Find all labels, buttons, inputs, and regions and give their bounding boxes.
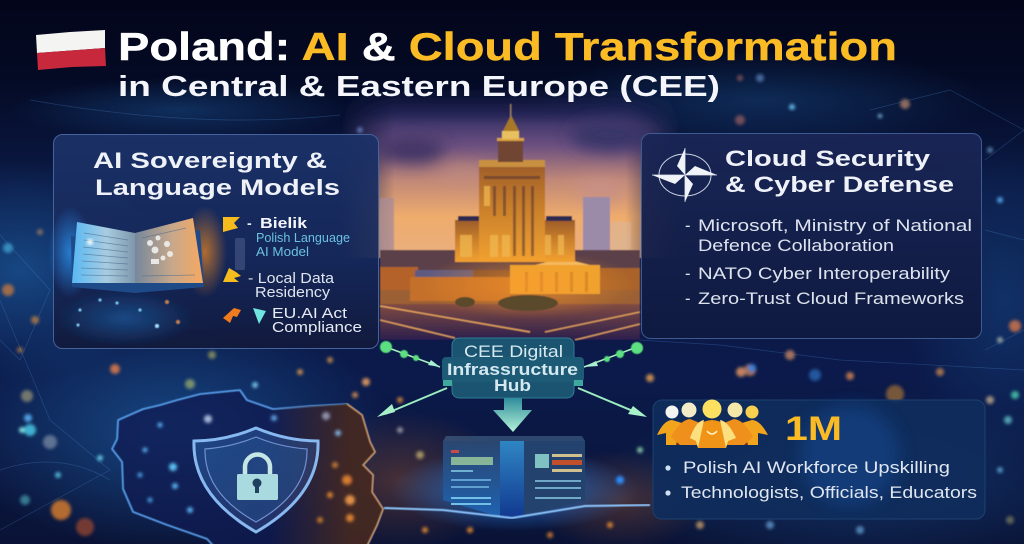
icon: glowing open book	[48, 206, 227, 298]
faded connector	[235, 238, 245, 270]
arrow: hub down to server	[493, 398, 532, 432]
title line one: Poland: AI & Cloud Transformation	[118, 26, 897, 69]
item: Bielik	[247, 215, 350, 259]
map outline	[112, 390, 383, 544]
arrow: hub to workforce panel	[578, 388, 647, 417]
title line two: in Central & Eastern Europe (CEE)	[118, 71, 720, 103]
side towers	[380, 198, 394, 250]
main tower	[479, 162, 545, 260]
bullet list: Technologists, Officials, Educators	[681, 484, 977, 502]
item: Bielik: Polish Language	[256, 230, 350, 245]
item: Bielik: -	[247, 215, 252, 231]
bullet list	[685, 217, 972, 308]
item: local data residency: - Local Data	[248, 270, 335, 287]
horizon city	[380, 250, 640, 270]
arrow: top right data chain to hub	[584, 342, 643, 367]
network dots in panel	[55, 290, 195, 346]
panel: workforce upskilling	[653, 400, 985, 519]
clouds	[378, 119, 650, 200]
bullet list: -	[685, 265, 690, 283]
arrow: hub to Poland map	[377, 388, 447, 417]
bullet list: Defence Collaboration	[698, 237, 894, 255]
callout: CEE Digital Infrastructure Hub: CEE Digital	[464, 342, 563, 361]
callout: CEE Digital Infrastructure Hub: Infrassructure	[447, 360, 578, 379]
bullet list: Polish AI Workforce Upskilling	[683, 459, 950, 477]
icon: yellow marker two	[223, 268, 241, 282]
panel: AI sovereignty and language models: Language Models	[95, 175, 340, 200]
panel: cloud security and cyber defense	[642, 134, 982, 338]
icon: NATO compass star	[652, 148, 717, 202]
server screens	[451, 450, 582, 505]
item: Bielik: Bielik	[260, 215, 308, 232]
photo: Palace of Culture and Science at sunset	[340, 88, 680, 340]
icon: yellow flag marker	[223, 217, 240, 232]
item: Bielik: AI Model	[256, 244, 309, 259]
trees	[455, 295, 558, 311]
item: local data residency	[248, 270, 335, 301]
icon: orange marker	[223, 308, 241, 323]
title	[36, 26, 897, 103]
callout: CEE Digital Infrastructure Hub: Hub	[494, 376, 531, 395]
panel heading: AI Sovereignty &	[93, 148, 327, 173]
item: local data residency: Residency	[255, 284, 331, 301]
item: EU AI Act compliance: EU.AI Act	[272, 305, 348, 322]
low wings and plaza	[380, 267, 418, 292]
road	[380, 300, 640, 340]
padlock	[237, 454, 278, 500]
icon: Polish flag	[36, 30, 106, 70]
callout: CEE Digital Infrastructure Hub	[442, 338, 584, 398]
panel: AI sovereignty and language models	[48, 134, 378, 348]
bullet list	[665, 459, 977, 502]
bullet list: -	[685, 290, 690, 308]
icon: cyan marker	[253, 308, 266, 324]
item: EU AI Act compliance	[272, 305, 362, 336]
bullet list: -	[685, 217, 690, 235]
wings	[455, 220, 575, 262]
map: Poland outline with network and shield	[112, 390, 383, 544]
stat: 1M: 1M	[785, 410, 842, 448]
arrow: top left data chain to hub	[380, 341, 440, 367]
sky	[340, 88, 680, 258]
item: EU AI Act compliance: Compliance	[272, 319, 362, 336]
eastern map region tint	[260, 404, 383, 544]
warm glow	[420, 251, 640, 319]
crown and spire	[498, 140, 523, 162]
bullet list: NATO Cyber Interoperability	[698, 265, 951, 283]
panel: cloud security and cyber defense: & Cyber Defense	[725, 172, 954, 197]
bullet list: Zero-Trust Cloud Frameworks	[698, 290, 964, 308]
bullet list: Microsoft, Ministry of National	[698, 217, 972, 235]
icon: server / data centre	[384, 436, 650, 532]
map dots	[138, 412, 355, 523]
panel heading: Cloud Security	[725, 146, 931, 171]
icon: group of people	[657, 400, 768, 448]
icon: shield with padlock	[194, 428, 318, 532]
